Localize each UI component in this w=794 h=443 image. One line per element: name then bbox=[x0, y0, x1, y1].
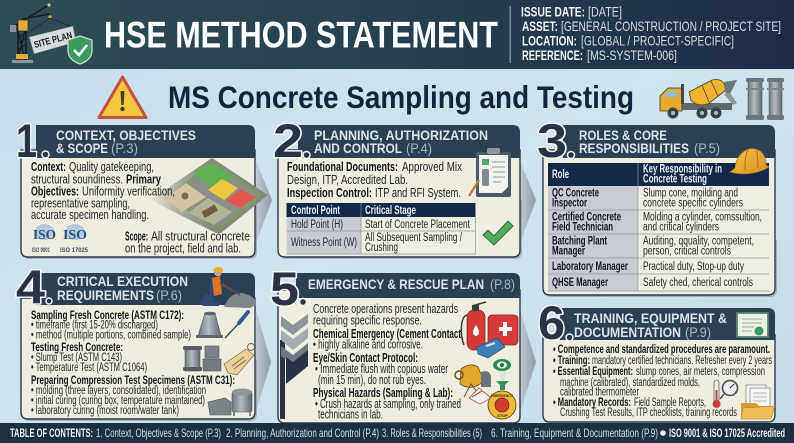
panel 1 heading: & SCOPE bbox=[56, 140, 108, 156]
panel 3 number bbox=[537, 114, 574, 167]
footer table of contents bar: TABLE OF CONTENTS: bbox=[10, 426, 93, 440]
execution requirements list: • molding (three layers, consolidated), identification bbox=[31, 385, 206, 397]
roles table: Auditing, qquality, competent, bbox=[643, 236, 754, 248]
icon: concrete mixer truck bbox=[660, 80, 737, 118]
icon: blue first aid box bbox=[477, 338, 505, 358]
emergency procedures text: Concrete operations present hazards bbox=[313, 301, 458, 316]
icon: clipboard bbox=[469, 148, 511, 197]
icon: cement mixer bbox=[455, 365, 491, 397]
document metadata: ASSET: bbox=[522, 18, 558, 34]
panel 5 heading: (P.8) bbox=[490, 276, 515, 292]
roles table: Safety ched, cherical controls bbox=[643, 277, 753, 289]
panel 3 heading: RESPONSIBILITIES bbox=[579, 140, 689, 156]
execution requirements list: • Temperature Test (ASTM C1064) bbox=[31, 362, 147, 374]
control point table bbox=[286, 203, 476, 254]
ISO logos: ISO bbox=[33, 228, 56, 243]
panel 4 number: 4 bbox=[16, 260, 45, 313]
arrow: panel 1 to 2 bbox=[256, 161, 272, 243]
execution requirements list: • laboratory curing (moist room/water tank) bbox=[31, 405, 179, 417]
panel 1 heading bbox=[56, 127, 196, 156]
icon: worker at concrete pile bbox=[198, 267, 256, 308]
panel 4 heading: (P.6) bbox=[156, 287, 182, 303]
roles table: Slump cone, moilding and bbox=[643, 188, 738, 200]
panel 3 heading: ROLES & CORE bbox=[579, 127, 667, 143]
footer table of contents bar: 1. Context, Objectives & Scope (P.3) bbox=[96, 426, 221, 440]
roles table: QC Concrete bbox=[552, 186, 599, 200]
subtitle: MS Concrete Sampling and Testing bbox=[168, 79, 634, 115]
foundational documents text: ITP and RFI System. bbox=[375, 185, 461, 200]
context and objectives text: Quality gatekeeping, bbox=[69, 159, 154, 174]
training and equipment list: machine (calibrated), standardized molds, bbox=[560, 377, 700, 389]
execution requirements list: • method (multiple portions, combined sample) bbox=[31, 330, 191, 342]
panel 6 number: 6 bbox=[538, 296, 565, 349]
document metadata: [GLOBAL / PROJECT-SPECIFIC] bbox=[581, 32, 734, 48]
execution requirements list: Testing Fresh Concrete: bbox=[31, 340, 123, 354]
emergency procedures text: Physical Hazards (Sampling & Lab): bbox=[313, 385, 453, 400]
panel 5: emergency and rescue plan bbox=[270, 262, 520, 423]
emergency procedures text: • Crush hazards at sampling, only trained bbox=[315, 396, 461, 411]
panel 3 number: 3 bbox=[537, 114, 567, 167]
roles table: concrete specific cylinders bbox=[643, 198, 743, 210]
document metadata bbox=[521, 4, 781, 63]
roles table: Practical duty, Stop-up duty bbox=[643, 261, 744, 273]
emergency procedures text: Chemical Emergency (Cement Contact bbox=[313, 326, 461, 341]
emergency procedures text: Eye/Skin Contact Protocol: bbox=[313, 350, 418, 365]
emergency procedures text: requiring specific response. bbox=[313, 312, 422, 328]
roles table: Role bbox=[552, 167, 569, 181]
panel 2 heading: PLANNING, AUTHORIZATION bbox=[314, 127, 488, 143]
control point table: Critical Stage bbox=[365, 203, 416, 217]
icon: eye wash station bbox=[493, 359, 511, 390]
ISO logos bbox=[32, 224, 89, 254]
execution requirements list: • timeframe (first 15-20% discharged) bbox=[31, 320, 158, 332]
site plan sign label: SITE PLAN bbox=[33, 30, 74, 51]
execution requirements list: • Slump Test (ASTM C143) bbox=[31, 352, 122, 364]
foundational documents text: Approved Mix bbox=[402, 159, 462, 174]
panel 6 heading: TRAINING, EQUIPMENT & bbox=[574, 310, 727, 326]
scope text: All structural concrete bbox=[151, 229, 250, 244]
foundational documents text: Foundational Documents: bbox=[287, 159, 398, 174]
panel 4 heading: REQUIREMENTS bbox=[57, 287, 154, 303]
footer table of contents bar: 2. Planning, Authorization and Control (P.4) bbox=[226, 426, 379, 440]
scope text: on the project, field and lab. bbox=[125, 241, 241, 256]
control point table: Hold Point (H) bbox=[291, 219, 343, 231]
header banner bbox=[0, 0, 794, 69]
emergency procedures text: technicians in lab. bbox=[318, 406, 383, 422]
roles table: Field Technician bbox=[552, 220, 613, 234]
icon: stacked cube molds bbox=[203, 346, 221, 371]
control point table: Witness Point (W) bbox=[291, 237, 357, 249]
context and objectives text: representative sampling, bbox=[31, 195, 130, 210]
panel 2: planning, authorization and control bbox=[273, 114, 522, 259]
ISO logos: ISO 9001 bbox=[32, 248, 50, 254]
panel 2 heading: AND CONTROL bbox=[314, 140, 402, 156]
panel 5 number: 5 bbox=[270, 262, 299, 315]
icon: concrete test cylinders bbox=[746, 78, 784, 120]
main title: HSE METHOD STATEMENT bbox=[104, 14, 498, 56]
ISO logos: ISO 17025 bbox=[60, 248, 89, 254]
icon: warning tag bbox=[469, 388, 491, 404]
icon: curing box bbox=[208, 398, 231, 415]
document metadata: [MS-SYSTEM-006] bbox=[587, 47, 677, 63]
execution requirements list: Preparing Compression Test Specimens (ASTM C31): bbox=[31, 373, 235, 387]
scope text bbox=[125, 229, 250, 256]
icon: curing tank bbox=[232, 388, 252, 416]
foundational documents text bbox=[287, 159, 462, 200]
context and objectives text: Primary bbox=[126, 171, 162, 186]
panel 2 number: 2 bbox=[273, 114, 303, 167]
document metadata: REFERENCE: bbox=[522, 47, 583, 63]
panel 4: critical execution requirements bbox=[16, 260, 257, 421]
training and equipment list bbox=[553, 342, 772, 419]
icon: crane with site plan sign and shield bbox=[10, 3, 92, 64]
panel 1 heading: (P.3) bbox=[111, 140, 138, 156]
icon: emergency stop button: EMERGENCY bbox=[491, 394, 513, 398]
arrow: panel 5 to 6 bbox=[520, 310, 536, 412]
icon: slump cone bbox=[196, 312, 223, 338]
panel 6: training, equipment and documentation bbox=[538, 296, 775, 422]
panel 1 heading: CONTEXT, OBJECTIVES bbox=[56, 127, 196, 143]
document metadata: ISSUE DATE: bbox=[521, 4, 585, 20]
panel 6 heading: (P.9) bbox=[685, 324, 711, 340]
roles table: QHSE Manager bbox=[552, 275, 608, 289]
context and objectives text: Context: bbox=[31, 159, 66, 174]
icon: documents bbox=[746, 385, 770, 412]
icon: folder bbox=[741, 403, 775, 419]
icon: red first aid kit bbox=[488, 315, 518, 345]
panel 3 heading: (P.5) bbox=[694, 140, 720, 156]
icon: emergency stop button: STOP bbox=[497, 413, 508, 418]
control point table: Control Point bbox=[291, 203, 340, 217]
emergency procedures text bbox=[313, 301, 461, 422]
training and equipment list: • Training: bbox=[553, 353, 590, 367]
arrow: panel 2 to 3 bbox=[520, 161, 536, 243]
panel 1 number: 1 bbox=[16, 114, 37, 167]
icon: hard hat bbox=[730, 149, 769, 174]
panel 6 heading: DOCUMENTATION bbox=[574, 324, 681, 340]
panel 3 heading bbox=[579, 127, 720, 156]
site plan isometric map bbox=[150, 158, 268, 233]
icon: emergency stop button bbox=[488, 391, 516, 419]
roles table: person, critical controls bbox=[643, 246, 731, 258]
icon: certificate bbox=[737, 313, 768, 337]
icon: fire extinguisher bbox=[461, 302, 486, 350]
context and objectives text: Uniformity verification, bbox=[82, 184, 175, 198]
icon: specimen tag bbox=[224, 344, 254, 375]
context and objectives text bbox=[31, 159, 175, 222]
arrow: panel 4 to 5 bbox=[256, 310, 271, 412]
context and objectives text: Objectives: bbox=[31, 184, 79, 198]
panel 4 heading: CRITICAL EXECUTION bbox=[57, 273, 188, 289]
roles table bbox=[548, 162, 769, 291]
execution requirements list: • initial curing (curing box, temperature maintained) bbox=[31, 395, 205, 407]
chevron stack decoration bbox=[280, 314, 308, 419]
footer table of contents bar: 6. Training, Equipment & Documentation (P.9) bbox=[491, 426, 658, 440]
training and equipment list: • Essential Equipment: bbox=[553, 364, 633, 378]
panel 2 heading: (P.4) bbox=[406, 140, 432, 156]
roles table: Batching Plant bbox=[552, 234, 607, 248]
roles table: Key Responsibility in bbox=[643, 162, 722, 176]
control point table: Crushing bbox=[365, 242, 398, 254]
panel 5 heading: EMERGENCY & RESCUE PLAN bbox=[308, 276, 484, 292]
icon: green check mark bbox=[483, 221, 513, 245]
training and equipment list: calibrated thermometer bbox=[560, 386, 639, 398]
panel 1: context, objectives and scope bbox=[16, 114, 268, 259]
training and equipment list: Field Sample Reports, bbox=[634, 397, 706, 409]
panel 4 heading bbox=[57, 273, 188, 303]
icon: pressure gauge bbox=[720, 380, 738, 399]
scope text: Scope: bbox=[125, 229, 148, 244]
roles table: Inspector bbox=[552, 196, 587, 210]
training and equipment list: • Mandatory Records: bbox=[553, 395, 631, 409]
context and objectives text: structural soundiness. bbox=[31, 171, 123, 186]
icon: tamping probe bbox=[225, 312, 248, 338]
emergency procedures text: • Immediate flush with copious water bbox=[315, 361, 448, 376]
footer table of contents bar bbox=[0, 423, 794, 443]
foundational documents text: Inspection Control: bbox=[287, 185, 372, 200]
icon: thermometer bbox=[712, 380, 720, 408]
control point table: All Subsequent Sampling / bbox=[365, 232, 463, 244]
roles table: Concrete Testing bbox=[643, 172, 707, 186]
roles table: Manager bbox=[552, 244, 585, 258]
panel 3: roles and core responsibilities bbox=[537, 114, 777, 297]
emergency procedures text: (min 15 min), do not rub eyes. bbox=[318, 372, 426, 387]
execution requirements list bbox=[31, 308, 235, 417]
context and objectives text: accurate specimen handling. bbox=[31, 207, 149, 222]
foundational documents text: Design, ITP, Accredited Lab. bbox=[287, 172, 408, 187]
control point table: Start of Concrete Placement bbox=[365, 219, 471, 231]
emergency procedures text: • highly alkaline and corrosive. bbox=[313, 336, 423, 352]
panel 2 heading bbox=[314, 127, 488, 156]
icon: warning triangle bbox=[99, 77, 146, 118]
roles table: Laboratory Manager bbox=[552, 259, 628, 273]
ISO logos: ISO bbox=[63, 228, 87, 243]
document metadata: [DATE] bbox=[588, 4, 622, 20]
roles table: and critical cylinders bbox=[643, 222, 719, 234]
footer table of contents bar: 3. Roles & Responsibilities (5) bbox=[382, 426, 482, 440]
execution requirements list: Sampling Fresh Concrete (ASTM C172): bbox=[31, 308, 184, 322]
panel 6 heading bbox=[574, 310, 727, 340]
icon: cylinder mold bbox=[183, 346, 202, 371]
document metadata: LOCATION: bbox=[522, 32, 577, 48]
roles table: Certified Concrete bbox=[552, 210, 621, 224]
